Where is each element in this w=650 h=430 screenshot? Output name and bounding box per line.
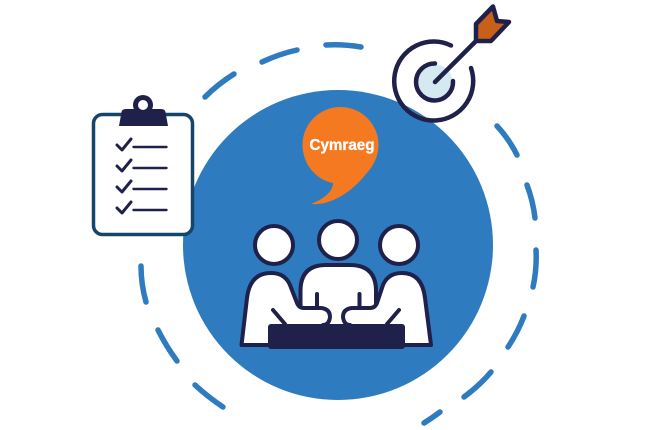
centre person arm lines — [317, 294, 360, 307]
person: centre — [300, 221, 376, 330]
icon: clipboard checklist — [94, 95, 192, 234]
icon: target with arrow — [394, 6, 509, 121]
table — [269, 325, 404, 348]
central blue circle — [183, 90, 493, 400]
person: right — [343, 226, 431, 345]
clipboard clip — [119, 95, 168, 126]
icon: three people at a table — [242, 221, 431, 348]
speech bubble: Cymraeg — [302, 107, 378, 204]
bubble label: Cymraeg — [310, 137, 374, 154]
person: left — [242, 226, 330, 345]
dashed orbit ring — [141, 45, 536, 423]
checklist rows — [117, 139, 166, 213]
